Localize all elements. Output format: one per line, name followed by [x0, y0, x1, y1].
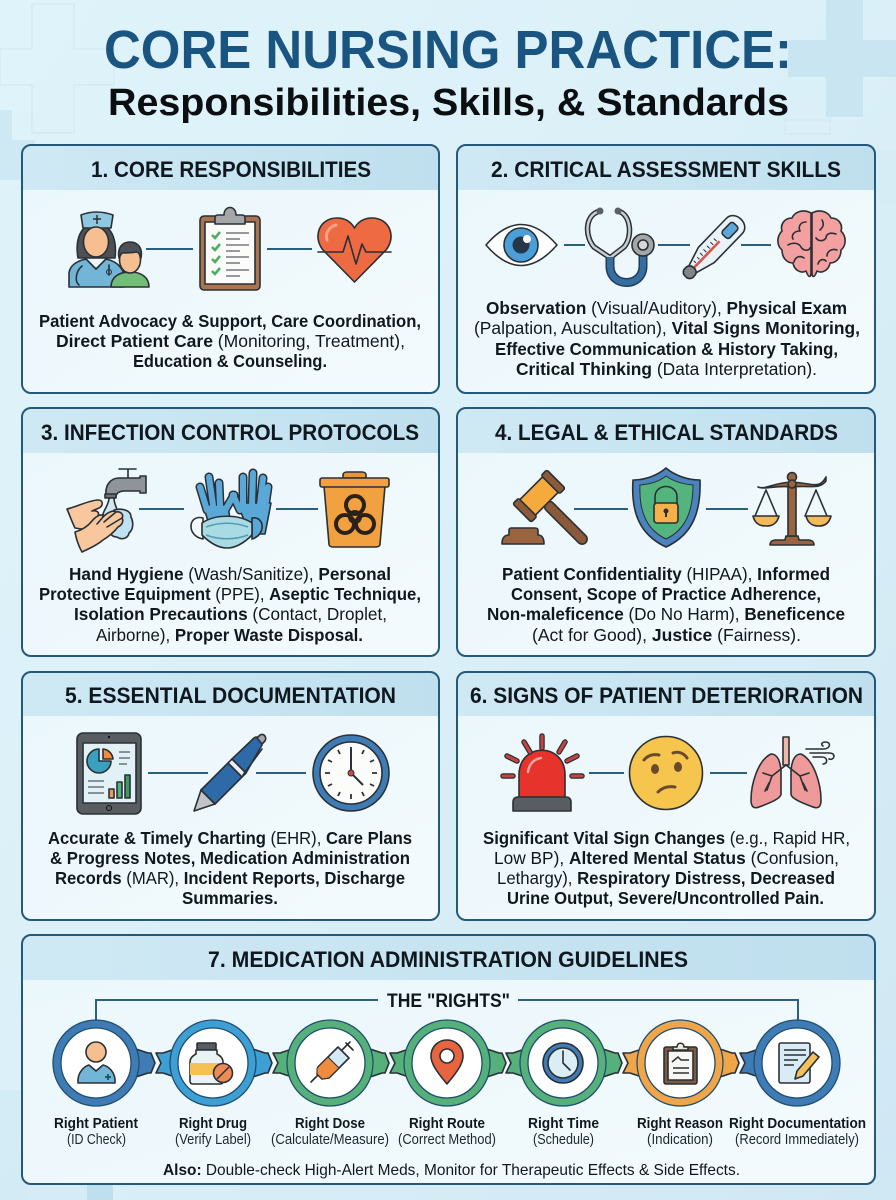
connector [256, 772, 306, 774]
step: right time: (Schedule) [533, 1132, 594, 1148]
panel card [457, 145, 875, 393]
icon: biohazard waste bin [320, 472, 389, 547]
bracket: the rights label [96, 991, 798, 1020]
main heading: CORE NURSING PRACTICE: [104, 20, 792, 80]
step: right dose: (Calculate/Measure) [271, 1132, 389, 1148]
connector [146, 248, 193, 250]
description text: Low BP), Altered Mental Status (Confusion, [494, 848, 839, 868]
panel card [457, 672, 875, 920]
description text: Hand Hygiene (Wash/Sanitize), Personal [69, 564, 391, 584]
step: right patient [53, 1020, 155, 1148]
connector [267, 248, 312, 250]
description text: Direct Patient Care (Monitoring, Treatment), [56, 331, 405, 351]
connector [276, 508, 318, 510]
step: right documentation: (Record Immediately) [735, 1132, 859, 1148]
connector [589, 772, 624, 774]
icon: gloves and mask [191, 473, 271, 548]
panel card [22, 145, 439, 393]
step: right time: Right Time [528, 1115, 599, 1132]
description text: Observation (Visual/Auditory), Physical Exam [486, 298, 847, 318]
step: right time [506, 1020, 622, 1148]
heading: 3. INFECTION CONTROL PROTOCOLS [41, 420, 419, 445]
icon: eye [486, 224, 557, 266]
description text: Critical Thinking (Data Interpretation). [516, 359, 817, 379]
panel: 4 legal and ethical standards [457, 408, 875, 656]
icon: gavel [502, 470, 603, 560]
panel: 5 essential documentation [22, 672, 439, 920]
description text: (Act for Good), Justice (Fairness). [532, 625, 801, 645]
connector [741, 244, 771, 246]
description text [474, 298, 860, 379]
connector [706, 508, 748, 510]
heading: 6. SIGNS OF PATIENT DETERIORATION [470, 683, 863, 708]
connector [710, 772, 747, 774]
panel card [22, 672, 439, 920]
heading: 4. LEGAL & ETHICAL STANDARDS [495, 420, 838, 445]
description text: Records (MAR), Incident Reports, Discharge [55, 868, 405, 888]
connector [564, 244, 585, 246]
description text: Protective Equipment (PPE), Aseptic Technique, [39, 584, 421, 604]
step: right dose [271, 1020, 389, 1148]
description text [39, 311, 421, 371]
description text: (Palpation, Auscultation), Vital Signs Monitoring, [474, 318, 860, 338]
step: right route: (Correct Method) [398, 1132, 496, 1148]
step: right drug: Right Drug [179, 1115, 247, 1132]
icon: stethoscope [588, 208, 654, 282]
panel: 2 critical assessment skills [457, 145, 875, 393]
step: right reason: (Indication) [647, 1132, 713, 1148]
description text [487, 564, 845, 645]
description text: Summaries. [182, 888, 278, 908]
description text [483, 828, 850, 908]
connector [658, 244, 690, 246]
icon: clock [313, 735, 389, 811]
icon: confused face [630, 736, 702, 810]
description text [48, 828, 412, 908]
icon: brain [778, 211, 845, 276]
step: right drug: (Verify Label) [175, 1132, 251, 1148]
description text: Significant Vital Sign Changes (e.g., Rapid HR, [483, 828, 850, 848]
icon: checklist clipboard [200, 208, 260, 290]
heading: 7. MEDICATION ADMINISTRATION GUIDELINES [208, 947, 688, 972]
step: right dose: Right Dose [295, 1115, 365, 1132]
icon: balance scales [753, 472, 831, 545]
connector [148, 772, 208, 774]
description text: Consent, Scope of Practice Adherence, [511, 584, 821, 604]
panel: 7 medication administration guidelines [22, 935, 875, 1184]
heading: 2. CRITICAL ASSESSMENT SKILLS [491, 157, 841, 182]
icon: security shield with lock [633, 468, 700, 547]
description text: Accurate & Timely Charting (EHR), Care Plans [48, 828, 412, 848]
description text: Education & Counseling. [133, 351, 327, 371]
heading: 1. CORE RESPONSIBILITIES [91, 157, 371, 182]
description text: Airborne), Proper Waste Disposal. [96, 625, 363, 645]
description text: Non-maleficence (Do No Harm), Beneficence [487, 604, 845, 624]
description text: Patient Confidentiality (HIPAA), Informed [502, 564, 830, 584]
icon: tablet with charts [77, 733, 141, 814]
icon: hand washing at faucet [67, 469, 146, 552]
panel card [22, 935, 875, 1184]
heading: 5. ESSENTIAL DOCUMENTATION [65, 683, 396, 708]
step: right patient: Right Patient [54, 1115, 138, 1132]
icon: heart with pulse [318, 218, 391, 282]
connector [574, 508, 628, 510]
description text: Effective Communication & History Taking, [495, 339, 838, 359]
step: right documentation [729, 1020, 866, 1148]
panel: 6 signs of patient deterioration [457, 672, 875, 920]
connector [139, 508, 184, 510]
bracket: the rights label: THE "RIGHTS" [387, 991, 510, 1012]
description text: Urine Output, Severe/Uncontrolled Pain. [507, 888, 824, 908]
description text: Lethargy), Respiratory Distress, Decreased [497, 868, 835, 888]
description text: Isolation Precautions (Contact, Droplet, [74, 604, 387, 624]
footer note: Also: Double-check High-Alert Meds, Monitor for Therapeutic Effects & Side Effects. [163, 1162, 740, 1179]
icon: pen [194, 734, 266, 811]
description text: Patient Advocacy & Support, Care Coordination, [39, 311, 421, 331]
panel: 1 core responsibilities [22, 145, 439, 393]
subheading: Responsibilities, Skills, & Standards [108, 82, 789, 124]
panel card [457, 408, 875, 656]
description text [39, 564, 421, 645]
step: right reason: Right Reason [637, 1115, 723, 1132]
step: right route: Right Route [409, 1115, 485, 1132]
title [104, 20, 792, 124]
panel card [22, 408, 439, 656]
icon: alarm siren [503, 736, 582, 811]
description text: & Progress Notes, Medication Administration [50, 848, 410, 868]
step: right reason [623, 1020, 739, 1148]
icon: thermometer [678, 211, 749, 284]
step: right documentation: Right Documentation [729, 1115, 866, 1132]
step: right patient: (ID Check) [67, 1132, 126, 1148]
icon: nurse and patient [69, 212, 149, 287]
step: right route [390, 1020, 506, 1148]
icon: lungs with airflow [751, 737, 834, 808]
panel: 3 infection control protocols [22, 408, 439, 656]
step: right drug [156, 1020, 272, 1148]
